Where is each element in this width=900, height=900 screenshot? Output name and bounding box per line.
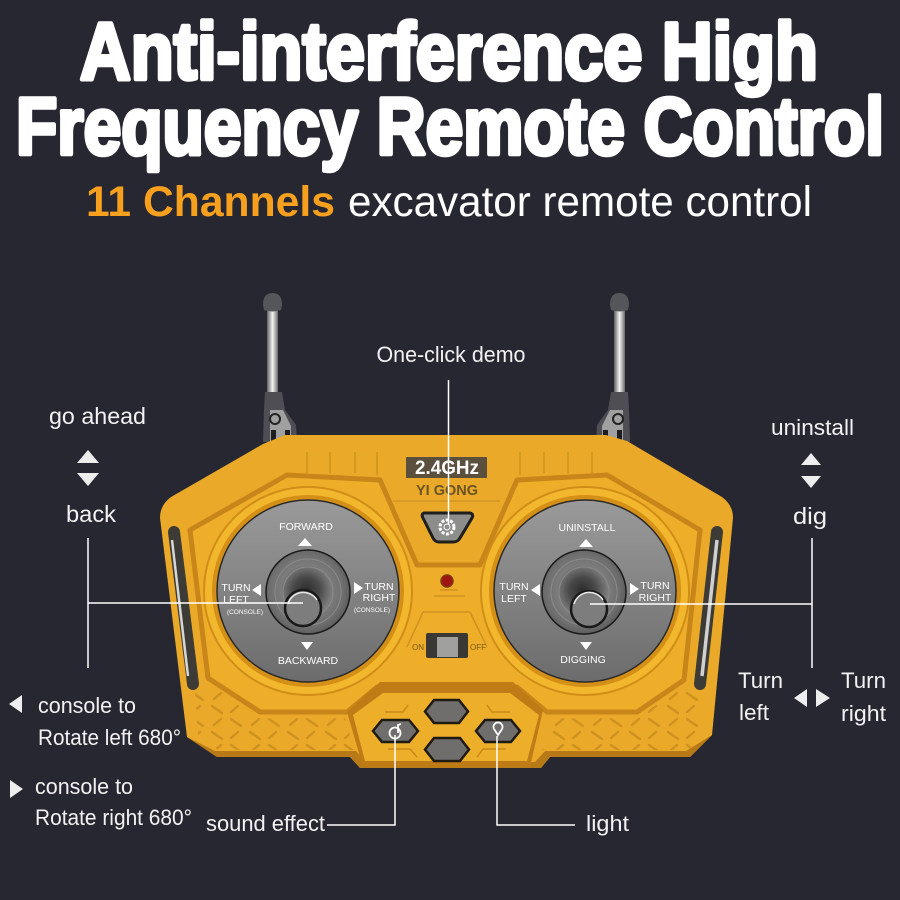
left joystick ring bbox=[204, 487, 412, 695]
callout: uninstall / dig bbox=[590, 415, 854, 668]
left joystick: LEFT bbox=[223, 594, 249, 606]
right joystick: LEFT bbox=[501, 593, 527, 605]
right side grip bbox=[700, 532, 717, 684]
right joystick: DIGGING bbox=[560, 654, 606, 666]
left joystick: FORWARD bbox=[279, 521, 333, 533]
callout: go ahead / back bbox=[49, 403, 303, 668]
demo button bbox=[422, 513, 473, 542]
left joystick: TURN bbox=[364, 581, 394, 593]
callout: console rotate right: Rotate right 680° bbox=[35, 805, 192, 830]
left side grip bbox=[174, 532, 193, 684]
bottom buttons bbox=[373, 700, 520, 761]
callout: turn left / turn right: left bbox=[739, 700, 769, 725]
callout: console rotate right bbox=[10, 774, 192, 830]
remote control body bbox=[160, 435, 733, 768]
callout: uninstall / dig: dig bbox=[793, 503, 827, 529]
callout: console rotate left bbox=[9, 693, 181, 750]
callout: light bbox=[497, 736, 629, 836]
left joystick: (CONSOLE) bbox=[354, 607, 390, 614]
centre badge: 2.4GHz: YI GONG bbox=[416, 482, 478, 499]
tread pattern right bbox=[542, 686, 705, 750]
centre badge: 2.4GHz: 2.4GHz bbox=[415, 458, 479, 479]
left joystick: BACKWARD bbox=[278, 655, 339, 667]
bottom button panel bbox=[347, 682, 543, 767]
right joystick bbox=[494, 500, 676, 682]
subtitle: 11 Channels bbox=[86, 178, 335, 226]
callout: go ahead / back: back bbox=[66, 501, 117, 527]
right antenna bbox=[596, 293, 630, 442]
left joystick bbox=[217, 500, 399, 682]
right joystick ring bbox=[481, 487, 689, 695]
subtitle bbox=[86, 178, 812, 226]
grip ridges bbox=[307, 452, 592, 475]
indicator LED bbox=[441, 575, 453, 587]
callout: sound effect: sound effect bbox=[206, 811, 325, 836]
title bbox=[16, 7, 884, 172]
left joystick: RIGHT bbox=[363, 592, 396, 604]
right joystick: UNINSTALL bbox=[558, 522, 616, 534]
body inner panel bbox=[190, 475, 700, 712]
left antenna bbox=[263, 293, 297, 442]
callout: turn left / turn right bbox=[738, 668, 886, 726]
callout: console rotate left: console to bbox=[38, 693, 136, 718]
callout: console rotate left: Rotate left 680° bbox=[38, 725, 181, 750]
callout: turn left / turn right: Turn bbox=[738, 668, 783, 693]
callout: light: light bbox=[586, 811, 629, 836]
power switch bbox=[412, 633, 486, 658]
left joystick: (CONSOLE) bbox=[227, 609, 263, 616]
demo shield line bbox=[393, 500, 500, 502]
right joystick: RIGHT bbox=[639, 592, 672, 604]
callout: console rotate right: console to bbox=[35, 774, 133, 799]
right joystick: TURN bbox=[499, 581, 529, 593]
callout: one-click demo: One-click demo bbox=[376, 342, 526, 367]
centre badge: 2.4GHz bbox=[406, 457, 487, 499]
power switch: ON bbox=[412, 643, 424, 652]
left joystick: TURN bbox=[221, 582, 251, 594]
sound and light button icons bbox=[390, 722, 502, 738]
power switch: OFF bbox=[470, 643, 486, 652]
callout: turn left / turn right: right bbox=[841, 701, 886, 726]
callout: uninstall / dig: uninstall bbox=[771, 415, 854, 440]
right joystick: TURN bbox=[640, 580, 670, 592]
callout: go ahead / back: go ahead bbox=[49, 403, 146, 429]
switch panel lines bbox=[407, 590, 487, 647]
tread pattern left bbox=[195, 684, 354, 750]
callout: sound effect bbox=[206, 735, 395, 836]
callout: turn left / turn right: Turn bbox=[841, 668, 886, 693]
subtitle: excavator remote control bbox=[348, 178, 812, 226]
